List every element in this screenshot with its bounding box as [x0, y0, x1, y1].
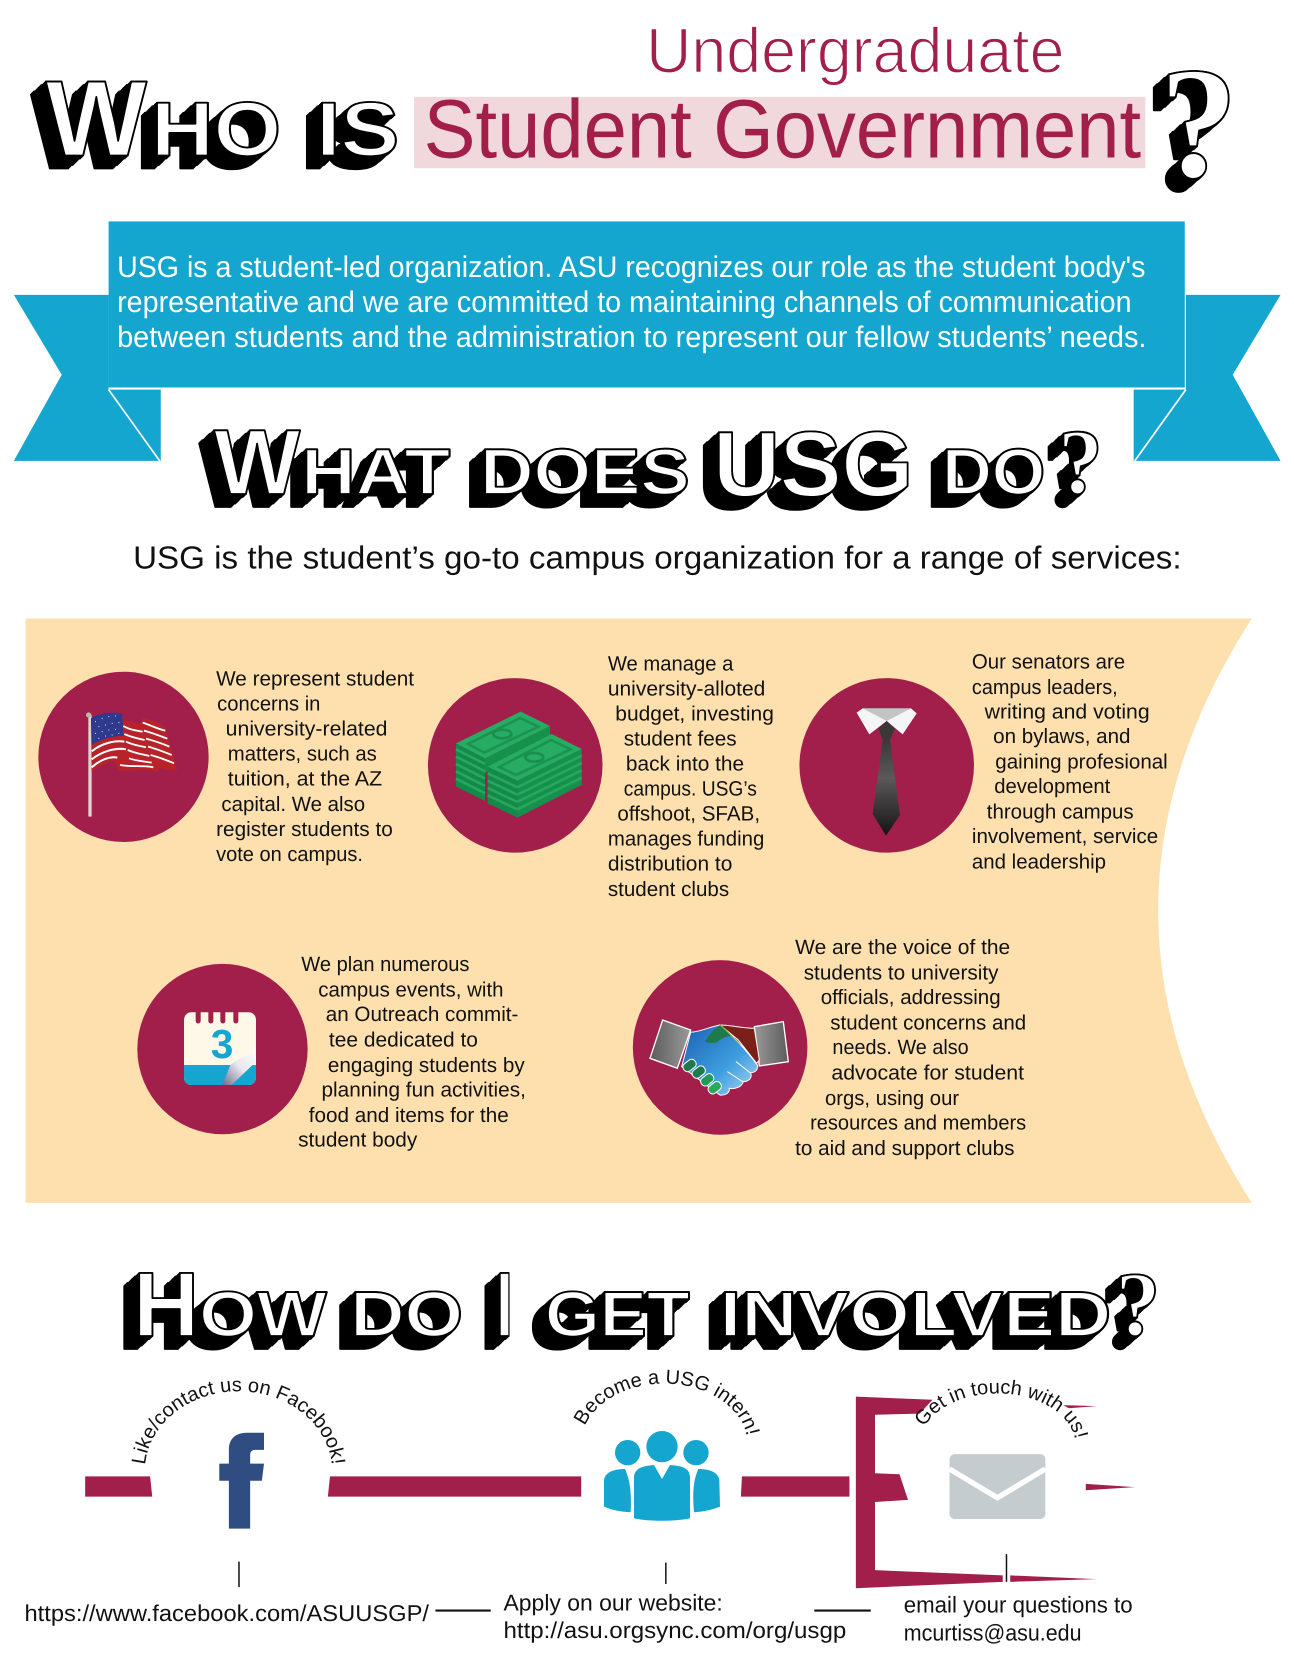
service text 3: through campus [987, 800, 1134, 824]
icon: collar and tie [857, 708, 917, 836]
service text 1: concerns in [217, 692, 320, 716]
service text 1 [216, 667, 415, 866]
service: advocacy [633, 936, 1026, 1160]
service text 1: tuition, at the AZ [228, 767, 382, 791]
heading: What does USG do?: HAT [301, 435, 450, 508]
service text 4: We plan numerous [301, 953, 470, 976]
link: email [904, 1592, 1133, 1646]
link: facebook url: https://www.facebook.com/ASUUSGP/ [24, 1601, 429, 1627]
title: Who is: HO [151, 87, 281, 172]
banner text: representative and we are committed to maintaining channels of communication [117, 285, 1132, 318]
icon: calendar: 3 [211, 1021, 233, 1067]
title: Who is: IS [316, 87, 399, 172]
ribbon tail right [1134, 295, 1281, 461]
service text 5: orgs, using our [825, 1087, 960, 1110]
circle: money [428, 678, 603, 853]
title question mark: ? [1159, 35, 1238, 212]
service text 3 [972, 650, 1168, 874]
service text 5: We are the voice of the [795, 936, 1010, 959]
curved label: Facebook: Like/contact us on Facebook! [132, 1380, 346, 1464]
service text 2: offshoot, SFAB, [617, 803, 760, 826]
service text 3: development [994, 775, 1111, 798]
heading: How do I get involved?: GET [545, 1278, 690, 1350]
curved label: intern: Become a USG intern! [573, 1370, 760, 1434]
service text 4: student body [298, 1128, 418, 1152]
icon: facebook f [219, 1433, 264, 1529]
heading: How do I get involved?: DO [350, 1278, 463, 1350]
connector lines [239, 1554, 1006, 1611]
title highlight: Student Government: Student Government [424, 82, 1141, 176]
heading: How do I get involved?: H [133, 1254, 199, 1356]
service text 1: We represent student [216, 667, 415, 691]
banner text: USG is a student-led organization. ASU recognizes our role as the student body's [117, 250, 1145, 283]
service text 1: matters, such as [228, 742, 377, 766]
service text 5: student concerns and [830, 1011, 1026, 1035]
circle: calendar [137, 964, 308, 1134]
service text 4: campus events, with [318, 978, 504, 1002]
service text 1: university-related [226, 717, 387, 741]
service text 3: writing and voting [984, 700, 1150, 724]
circle: flag [38, 672, 209, 842]
service text 4: engaging students by [328, 1054, 525, 1077]
heading: How do I get involved?: INVOLVED [720, 1278, 1111, 1350]
title: Who is: W [46, 60, 148, 179]
icon: american flag [86, 712, 177, 817]
service text 2: back into the [626, 753, 744, 776]
service text 2: student clubs [608, 878, 729, 901]
banner text: between students and the administration to represent our fellow students’ needs. [117, 320, 1146, 353]
heading: How do I get involved?: ? [1116, 1253, 1160, 1355]
icon: calendar [184, 1011, 256, 1085]
heading: How do I get involved?: I [496, 1254, 513, 1356]
link: email: email your questions to [904, 1592, 1133, 1618]
circle: tie [799, 678, 974, 853]
link: website: http://asu.orgsync.com/org/usgp [504, 1618, 846, 1644]
heading: What does USG do?: DO [942, 435, 1045, 508]
heading: What does USG do? [214, 410, 1103, 516]
service: senators [799, 650, 1168, 874]
service text 2: budget, investing [615, 703, 774, 726]
icon: people [604, 1431, 720, 1521]
service text 5: advocate for student [831, 1061, 1025, 1085]
service text 4: planning fun activities, [321, 1078, 526, 1102]
banner ribbon [14, 221, 1281, 461]
link: website: Apply on our website: [504, 1590, 723, 1616]
title: Who is [46, 60, 399, 179]
service text 2: student fees [624, 728, 737, 751]
icon: handshake [650, 1020, 788, 1096]
panel: services [26, 618, 1252, 1203]
service text 2: university-alloted [608, 678, 765, 701]
service text 3: Our senators are [972, 650, 1125, 674]
service text 4 [298, 953, 526, 1152]
banner text [117, 250, 1146, 353]
service text 1: vote on campus. [216, 843, 363, 866]
service text 4: food and items for the [309, 1104, 509, 1127]
service text 5: needs. We also [832, 1036, 969, 1059]
service text 5: to aid and support clubs [795, 1137, 1015, 1160]
service text 5: officials, addressing [821, 986, 1001, 1009]
service text 1: register students to [216, 818, 393, 841]
icon: money stacks [456, 712, 582, 818]
service text 4: tee dedicated to [329, 1028, 478, 1052]
service text 2: manages funding [608, 828, 764, 851]
link: email: mcurtiss@asu.edu [904, 1620, 1082, 1646]
heading: What does USG do?: ? [1058, 410, 1103, 513]
service text 1: capital. We also [221, 793, 365, 816]
service text 2 [608, 653, 774, 901]
heading: What does USG do?: USG [713, 413, 913, 516]
link: website [504, 1590, 846, 1644]
intro sentence: USG is the student’s go-to campus organization for a range of services: [133, 541, 1182, 576]
ribbon body [109, 221, 1185, 387]
subtitle: Undergraduate: Undergraduate [646, 15, 1064, 86]
service: budget [428, 653, 774, 901]
ribbon tail left [14, 295, 161, 461]
service text 2: distribution to [608, 853, 733, 876]
heading: How do I get involved? [133, 1253, 1160, 1356]
heading: What does USG do?: W [214, 411, 301, 514]
heading: What does USG do?: DOES [480, 435, 690, 508]
circle: handshake [633, 960, 807, 1135]
service text 3: and leadership [972, 851, 1106, 874]
service text 2: campus. USG’s [624, 778, 757, 801]
service text 5: students to university [804, 961, 999, 985]
heading: How do I get involved?: OW [199, 1278, 327, 1350]
service text 3: gaining profesional [995, 750, 1168, 774]
service text 3: on bylaws, and [993, 725, 1130, 748]
service: representation [38, 667, 415, 866]
curved label: contact: Get in touch with us! [916, 1380, 1088, 1438]
timeline bars [85, 1397, 1135, 1588]
icon: envelope [950, 1454, 1045, 1519]
service: events [137, 953, 526, 1152]
service text 3: involvement, service [972, 825, 1158, 848]
service text 3: campus leaders, [972, 676, 1118, 699]
service text 2: We manage a [608, 653, 734, 676]
service text 4: an Outreach commit- [326, 1003, 518, 1026]
service text 5: resources and members [810, 1111, 1026, 1135]
service text 5 [795, 936, 1026, 1160]
